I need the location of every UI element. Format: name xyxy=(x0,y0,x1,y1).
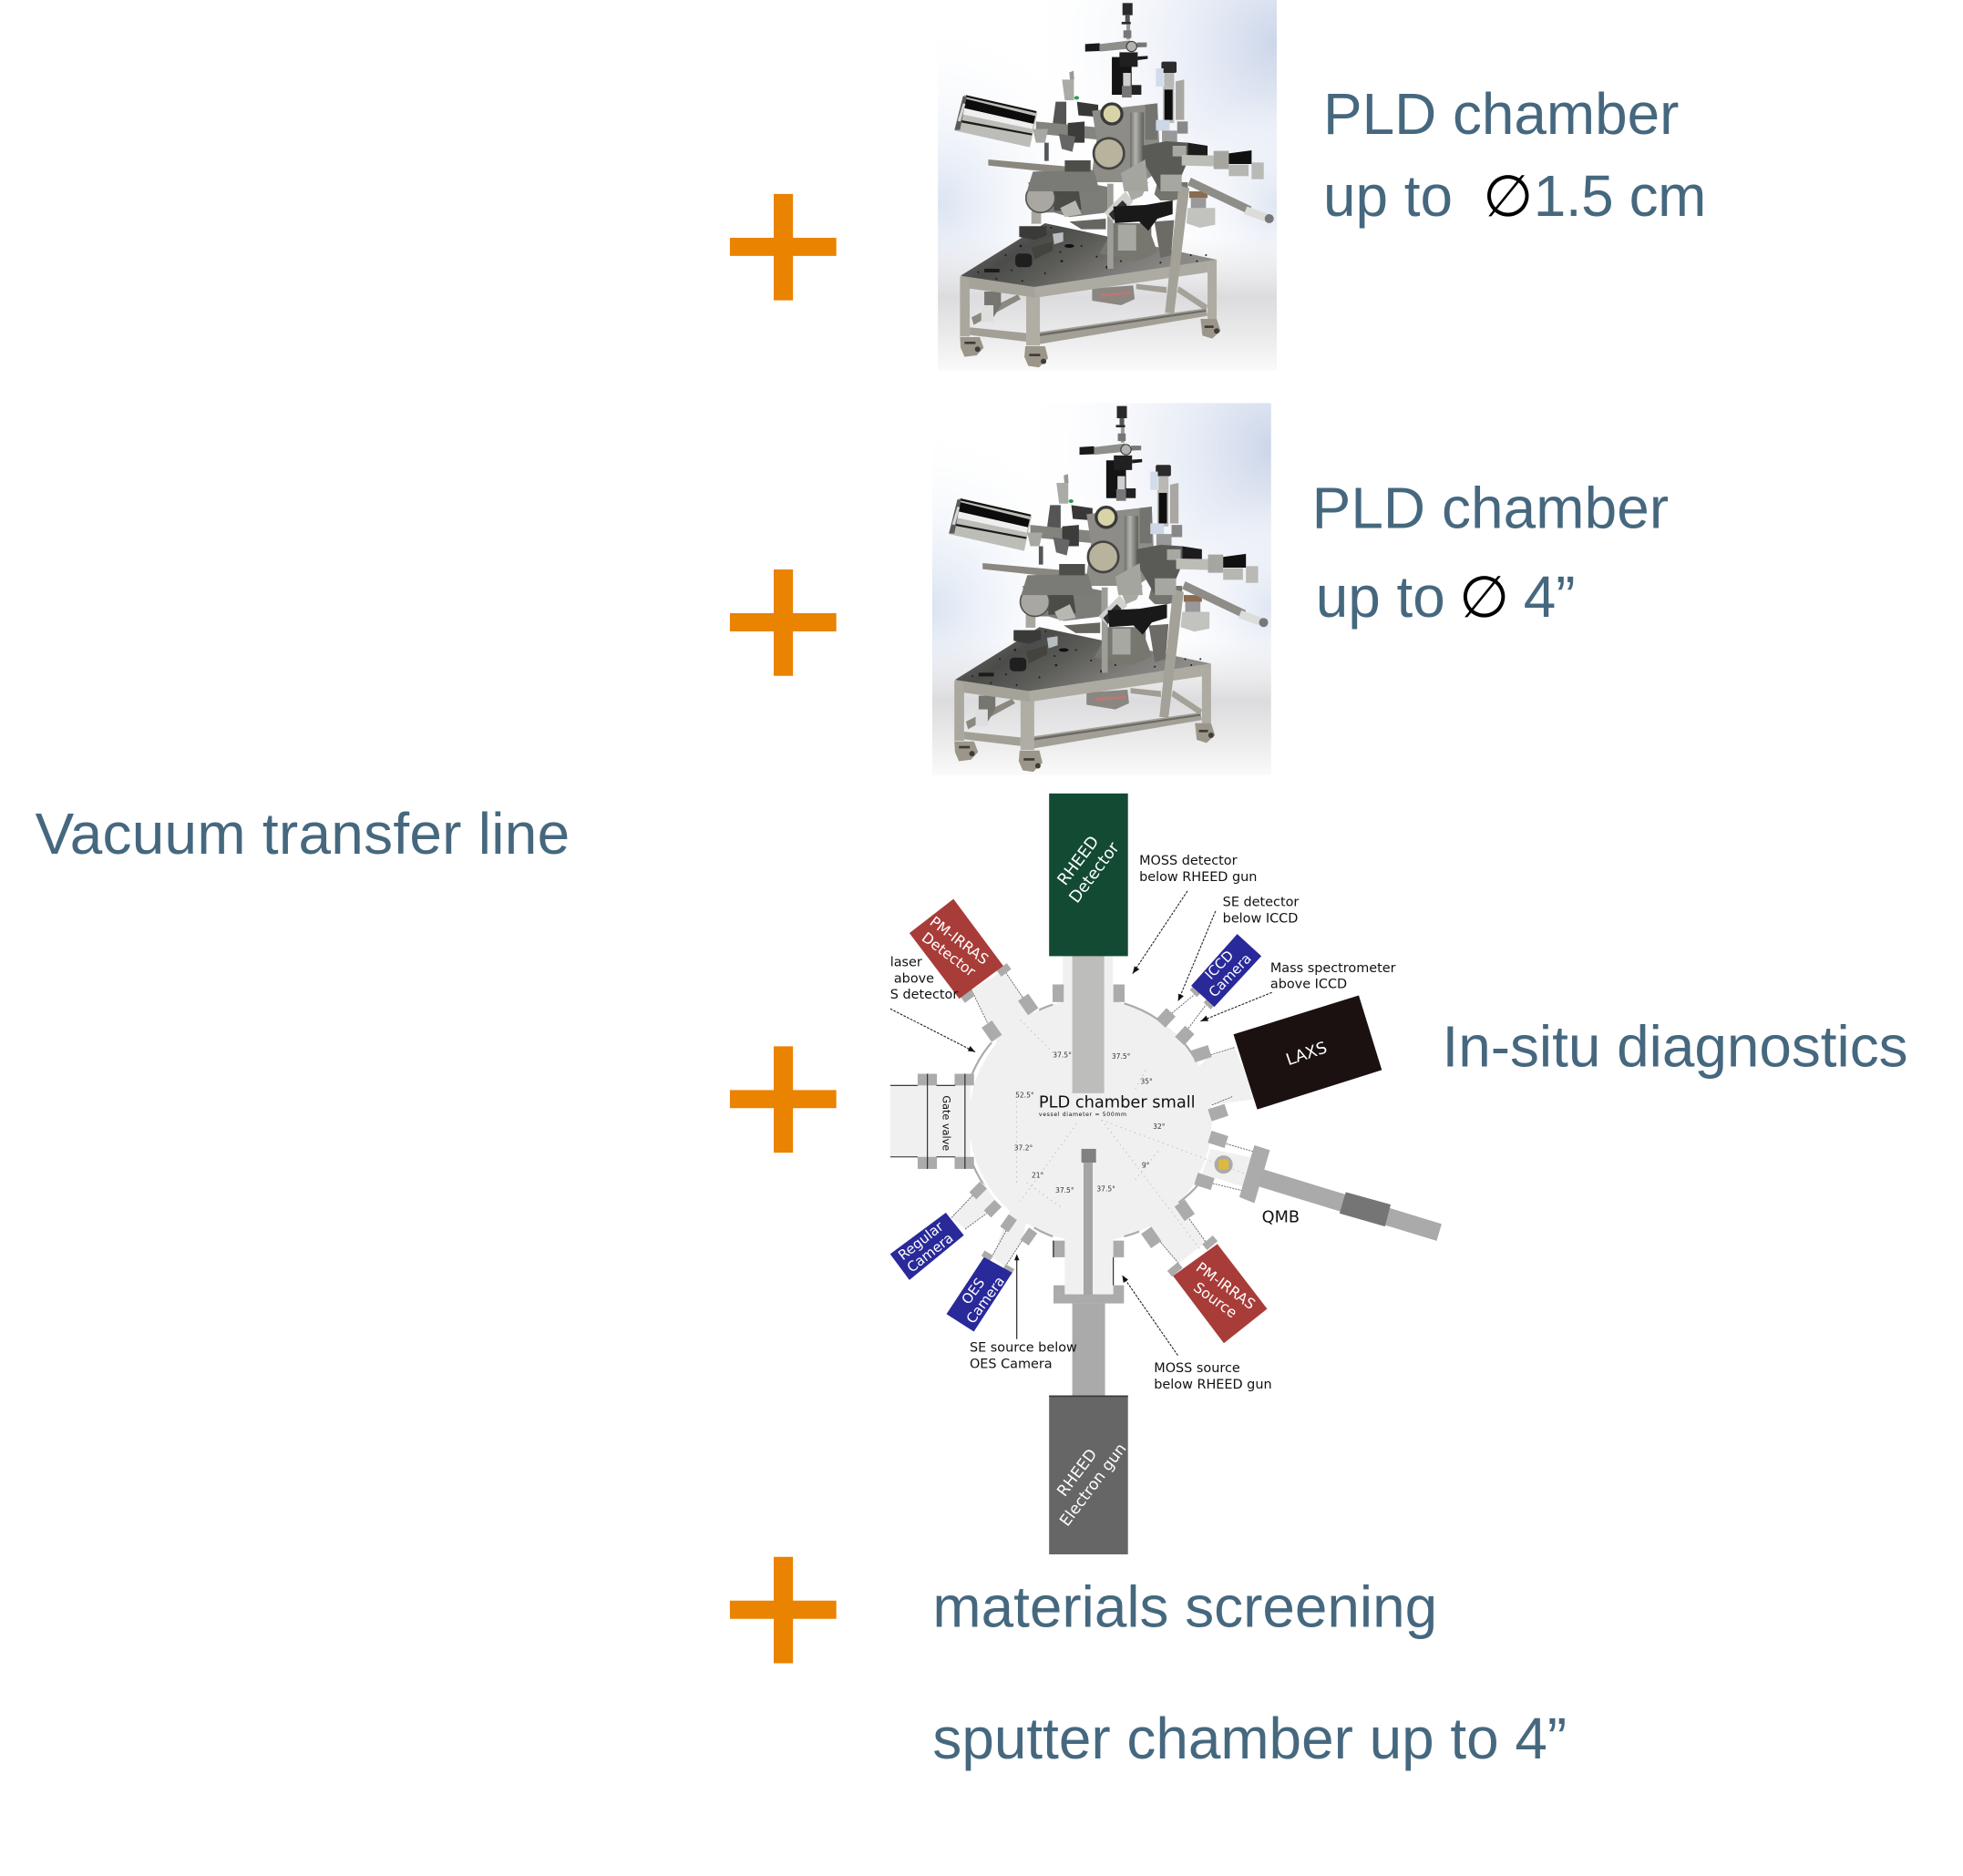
callout: SE detector: below ICCD xyxy=(1223,911,1298,926)
callout: SE detector: SE detector xyxy=(1223,895,1299,909)
PM-IRRAS source: PM-IRRAS xyxy=(1193,1258,1259,1313)
regular camera xyxy=(890,1213,964,1280)
chamber circle xyxy=(969,999,1212,1242)
PM-IRRAS detector xyxy=(910,899,1003,999)
plus sign 3 xyxy=(730,1046,837,1153)
callout: SE source xyxy=(970,1254,1077,1371)
callout: mass spectrometer xyxy=(1200,961,1396,1021)
QMB xyxy=(1215,1155,1442,1241)
callout: SE detector xyxy=(1178,895,1299,1001)
RHEED electron gun: Electron gun xyxy=(1056,1440,1131,1530)
callout: MOSS detector: MOSS detector xyxy=(1139,854,1238,868)
callout: mass spectrometer: Mass spectrometer xyxy=(1270,961,1396,976)
OES camera: Camera xyxy=(963,1274,1008,1327)
callout: MOSS source: MOSS source xyxy=(1154,1361,1240,1376)
OES camera xyxy=(947,1257,1012,1331)
angle labels: 37.5° xyxy=(1096,1185,1115,1194)
RHEED electron gun: RHEED xyxy=(1053,1446,1101,1501)
heading: vacuum transfer line: Vacuum transfer line xyxy=(36,801,570,866)
callout: laser: above xyxy=(894,971,934,986)
ICCD camera xyxy=(1191,934,1261,1007)
ICCD camera: Camera xyxy=(1206,950,1255,1000)
callout: mass spectrometer: above ICCD xyxy=(1270,977,1347,991)
text: materials screening: materials screening xyxy=(932,1574,1437,1640)
LAXS: LAXS xyxy=(1283,1038,1330,1070)
text: PLD chamber up to 1.5 cm: ∅ xyxy=(1483,162,1533,230)
PM-IRRAS source xyxy=(1173,1244,1267,1343)
port edges xyxy=(951,970,1257,1266)
callout: MOSS detector: below RHEED gun xyxy=(1139,870,1257,885)
RHEED detector: RHEED xyxy=(1053,833,1103,889)
text: PLD chamber up to 1.5 cm xyxy=(1323,81,1706,230)
gate valve lines xyxy=(890,1074,1114,1286)
photo: PLD chamber 2 xyxy=(932,403,1271,775)
callout: SE source: SE source below xyxy=(970,1340,1077,1355)
text: sputter chamber: sputter chamber up to 4” xyxy=(932,1706,1567,1771)
angle labels: 52.5° xyxy=(1015,1092,1034,1100)
text: PLD chamber up to 4 inch: up to xyxy=(1316,564,1445,630)
radial dotted lines xyxy=(1016,1020,1252,1252)
plus sign 2 xyxy=(730,569,837,676)
RHEED detector: Detector xyxy=(1065,838,1124,907)
callout: MOSS source xyxy=(1122,1276,1272,1392)
angle labels xyxy=(1014,1051,1166,1194)
text: PLD chamber up to 4 inch xyxy=(1312,476,1669,630)
chamber wall arcs xyxy=(971,1003,1200,1236)
LAXS xyxy=(1234,996,1382,1110)
angle labels: 37.5° xyxy=(1112,1052,1131,1061)
RHEED electron gun xyxy=(1049,1396,1128,1554)
plus sign 1 xyxy=(730,194,837,301)
PM-IRRAS source: Source xyxy=(1190,1278,1240,1321)
callout: SE source: OES Camera xyxy=(970,1357,1053,1371)
RHEED gun stem xyxy=(1073,1149,1105,1396)
angle labels: 37.2° xyxy=(1014,1143,1033,1152)
RHEED detector stem xyxy=(1073,956,1105,1093)
PM-IRRAS detector: PM-IRRAS xyxy=(927,913,992,968)
text: PLD chamber up to 4 inch: ∅ xyxy=(1459,563,1509,630)
angle labels: 32° xyxy=(1153,1123,1166,1131)
regular camera: Camera xyxy=(904,1230,956,1276)
angle labels: 37.5° xyxy=(1053,1051,1072,1060)
text: PLD chamber up to 1.5 cm: up to xyxy=(1323,163,1453,229)
OES camera: OES xyxy=(959,1275,988,1307)
callout: laser: laser xyxy=(890,955,922,969)
text: in-situ diagnostics: In-situ diagnostics xyxy=(1442,1013,1908,1079)
callout: MOSS detector xyxy=(1133,854,1257,974)
angle labels: 9° xyxy=(1142,1162,1150,1170)
tubes and ports xyxy=(890,951,1259,1295)
text: PLD chamber up to 1.5 cm: PLD chamber xyxy=(1323,81,1679,147)
RHEED detector xyxy=(1049,794,1128,956)
ICCD tube xyxy=(1172,994,1207,1032)
callout: MOSS source: below RHEED gun xyxy=(1154,1378,1272,1392)
plus sign 4 xyxy=(730,1557,837,1663)
text: PLD chamber up to 4 inch: 4” xyxy=(1524,564,1576,630)
text: PLD chamber up to 1.5 cm: 1.5 cm xyxy=(1534,163,1706,229)
angle labels: 35° xyxy=(1140,1078,1153,1086)
angle labels: 37.5° xyxy=(1055,1186,1074,1194)
angle labels: 21° xyxy=(1032,1172,1044,1180)
callout: laser xyxy=(890,955,975,1052)
chamber title: PLD chamber small xyxy=(1039,1093,1196,1112)
QMB: QMB xyxy=(1262,1208,1300,1226)
gate valve label: Gate valve xyxy=(940,1095,951,1151)
regular camera: Regular xyxy=(895,1218,947,1264)
ICCD camera: ICCD xyxy=(1202,948,1237,983)
PM-IRRAS detector: Detector xyxy=(919,928,980,980)
text: PLD chamber up to 4 inch: PLD chamber xyxy=(1312,476,1669,541)
callout: laser: S detector xyxy=(890,988,958,1002)
chamber title: vessel diameter = 500mm xyxy=(1039,1112,1126,1118)
flanges xyxy=(918,963,1269,1304)
diagram: PLD chamber small top view xyxy=(890,794,1442,1554)
photo: PLD chamber 1 xyxy=(938,0,1277,371)
